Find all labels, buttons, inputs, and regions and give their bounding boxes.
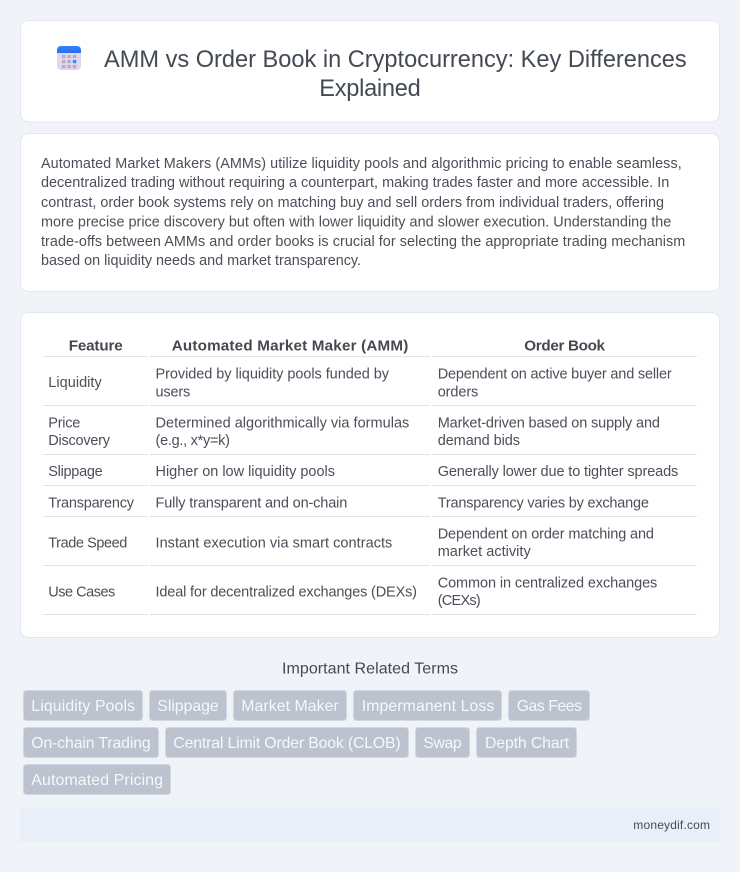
row: price discovery: Price — [48, 415, 80, 431]
tag: impermanent loss: Impermanent Loss — [362, 698, 494, 715]
tag group: related terms — [24, 690, 590, 794]
tag: swap: Swap — [423, 735, 462, 752]
row: transparency: Transparency varies by exchange — [438, 495, 649, 511]
tag: automated pricing: Automated Pricing — [31, 772, 163, 789]
title: AMM vs Order Book in Cryptocurrency: Key Differences — [104, 47, 687, 73]
row: trade speed — [43, 526, 697, 566]
section heading: related terms: Important Related Terms — [282, 660, 458, 677]
tag: impermanent loss — [354, 690, 502, 720]
row: price discovery: demand bids — [438, 433, 520, 449]
intro text: more precise price discovery but often with lower liquidity and slower execution. Understanding the — [41, 215, 671, 231]
table header: Feature — [69, 338, 123, 355]
row: liquidity: Liquidity — [48, 375, 102, 391]
row: price discovery: Discovery — [48, 433, 111, 449]
row: slippage: Slippage — [48, 464, 103, 480]
table header: Automated Market Maker (AMM) — [172, 338, 408, 355]
table header: Order Book — [524, 338, 606, 355]
tag: central limit order book: Central Limit Order Book (CLOB) — [173, 735, 401, 752]
row: liquidity — [43, 366, 697, 406]
intro text: based on liquidity needs and market transparency. — [41, 253, 361, 269]
footer bar — [20, 808, 720, 842]
row: slippage: Generally lower due to tighter spreads — [438, 464, 678, 480]
intro text: trade-offs between AMMs and order books is crucial for selecting the appropriate trading mechanism — [41, 234, 685, 250]
row: transparency: Fully transparent and on-chain — [156, 495, 347, 511]
row: use cases: (CEXs) — [438, 593, 481, 609]
row: use cases: Common in centralized exchanges — [438, 575, 657, 591]
tag: slippage: Slippage — [157, 698, 219, 715]
icon: calendar — [57, 46, 81, 70]
row: use cases: Use Cases — [48, 584, 115, 600]
tag: market maker — [234, 690, 346, 720]
tag: slippage — [150, 690, 226, 720]
row: transparency: Transparency — [48, 495, 135, 511]
row: use cases — [43, 575, 697, 615]
tag: on-chain trading — [24, 728, 158, 758]
tag: liquidity pools: Liquidity Pools — [31, 698, 135, 715]
row: use cases: Ideal for decentralized exchanges (DEXs) — [156, 584, 417, 600]
row: slippage: Higher on low liquidity pools — [156, 464, 335, 480]
intro text: decentralized trading without requiring a counterpart, making trades faster and more accessible. In — [41, 175, 669, 191]
row: transparency — [43, 495, 697, 517]
row: price discovery: (e.g., x*y=k) — [156, 433, 230, 449]
row: price discovery — [43, 415, 697, 455]
tag: gas fees — [508, 690, 590, 720]
tag: swap — [416, 728, 470, 758]
row: liquidity: orders — [438, 384, 478, 400]
tag: market maker: Market Maker — [241, 698, 339, 715]
tag: on-chain trading: On-chain Trading — [31, 735, 151, 752]
tag: central limit order book — [166, 728, 408, 758]
title: Explained — [319, 76, 421, 102]
panel: title card — [20, 20, 720, 122]
row: price discovery: Market-driven based on supply and — [438, 415, 660, 431]
panel: intro paragraph — [20, 134, 720, 292]
panel: comparison table — [20, 312, 720, 638]
row: trade speed: market activity — [438, 544, 531, 560]
intro text: Automated Market Makers (AMMs) utilize liquidity pools and algorithmic pricing to enable seamless, — [41, 156, 682, 172]
table header — [43, 338, 697, 357]
intro text: contrast, order book systems rely on matching buy and sell orders from individual traders, offering — [41, 195, 664, 211]
tag: gas fees: Gas Fees — [517, 698, 582, 715]
title — [104, 47, 687, 102]
intro text — [41, 156, 685, 269]
tag: depth chart: Depth Chart — [485, 735, 570, 752]
footer source text: moneydif.com — [633, 818, 710, 832]
tag: automated pricing — [24, 764, 170, 794]
row: trade speed: Instant execution via smart contracts — [156, 535, 392, 551]
row: liquidity: Dependent on active buyer and seller — [438, 366, 672, 382]
tag: depth chart — [476, 728, 576, 758]
row: liquidity: Provided by liquidity pools funded by — [156, 366, 390, 382]
row: price discovery: Determined algorithmically via formulas — [156, 415, 409, 431]
tag: liquidity pools — [24, 690, 142, 720]
row: slippage — [43, 464, 697, 486]
row: liquidity: users — [156, 384, 190, 400]
row: trade speed: Dependent on order matching and — [438, 526, 654, 542]
row: trade speed: Trade Speed — [48, 535, 127, 551]
